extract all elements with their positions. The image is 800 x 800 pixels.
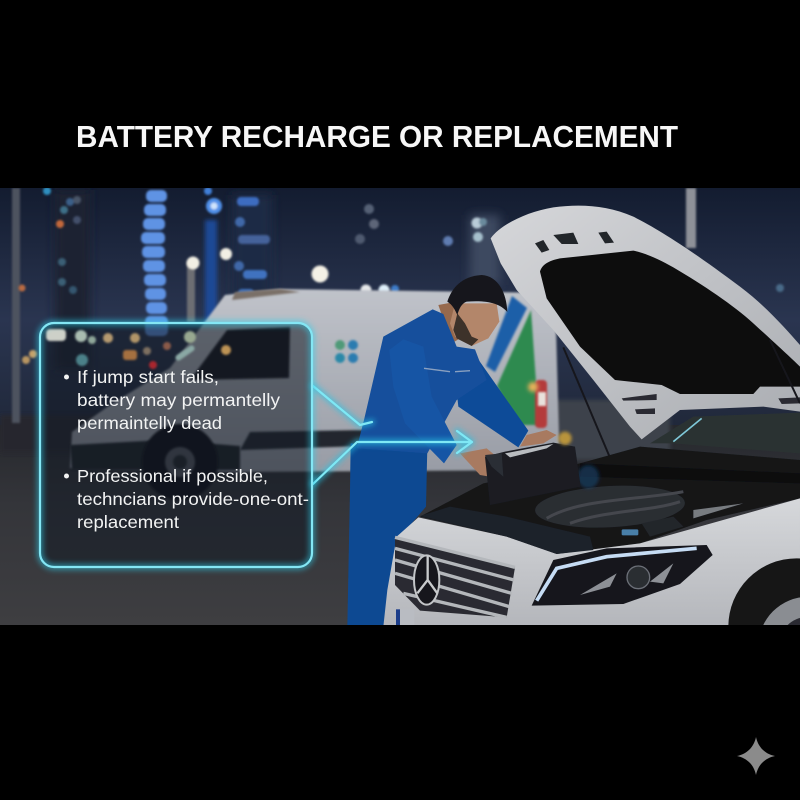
car front body: [383, 498, 800, 627]
mechanic: torso: [357, 309, 487, 453]
bullet 1: battery may permantelly: [77, 390, 280, 410]
mechanic: head: [450, 303, 499, 346]
windshield: [650, 413, 800, 444]
dark cowl panel: [420, 507, 593, 554]
mechanic: hands: [460, 448, 497, 477]
engine bay: [420, 447, 800, 554]
front wheel: [728, 558, 800, 697]
mechanic: near arm: [389, 339, 457, 463]
bullet 2: techncians provide-one-ont-: [77, 489, 309, 509]
grille: [395, 537, 515, 617]
bullet 2: replacement: [77, 512, 179, 532]
night city background: [0, 187, 800, 625]
service van: [70, 289, 560, 500]
open hood: [491, 206, 800, 439]
mechanic: legs: [347, 443, 427, 627]
bullet 1: If jump start fails,: [77, 367, 219, 387]
plate: [396, 609, 414, 627]
mechanic: far arm: [455, 350, 528, 447]
car battery: [485, 443, 581, 505]
bullet 1: permaintelly dead: [77, 413, 222, 433]
bullet 1: [64, 367, 280, 433]
bullet 2: [64, 466, 309, 532]
callout border: [40, 323, 312, 567]
glowing blue light around battery: [578, 465, 599, 488]
headlight: [532, 545, 713, 606]
title: BATTERY RECHARGE OR REPLACEMENT: [76, 119, 678, 154]
star badge: [414, 555, 439, 605]
callout text: [64, 367, 309, 532]
mechanic and car, drawn in zoomed coordinates: [347, 206, 800, 625]
mechanic: neck: [438, 302, 460, 343]
callout connector lines and arrow: [313, 386, 472, 484]
bullet 2: Professional if possible,: [77, 466, 268, 486]
spark glow: [558, 432, 572, 445]
hood struts: [563, 340, 800, 462]
icon: sparkle watermark: [737, 737, 775, 775]
callout panel: [22, 323, 312, 567]
photo: mechanic replacing a car battery at night: [0, 188, 800, 625]
